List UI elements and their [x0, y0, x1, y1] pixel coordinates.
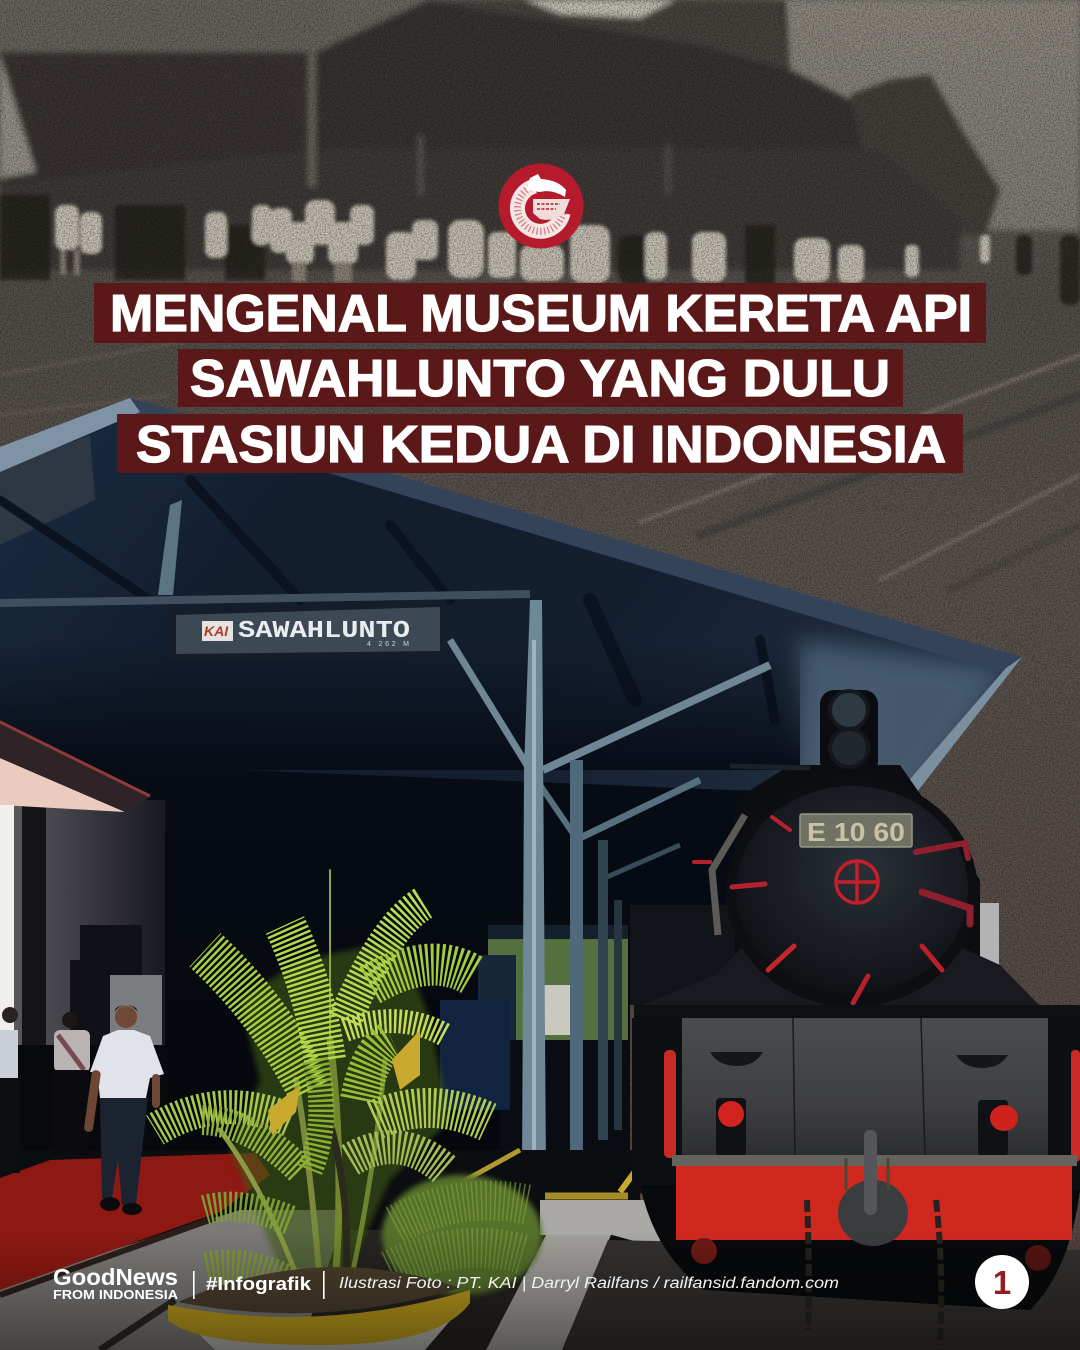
yellow platform edge markings: [455, 1150, 520, 1186]
horizontal roof beam: [0, 594, 530, 603]
cylinder saddles: [640, 940, 1040, 1006]
title line 1: MENGENAL MUSEUM KERETA API: [110, 285, 972, 343]
footer divider and hashtag: [193, 1271, 325, 1299]
red door clamps: [694, 817, 970, 1003]
bumper beam: [672, 1155, 1077, 1166]
old station roof and eaves: [0, 0, 1000, 270]
icon: GoodNews garuda logo: [498, 164, 584, 248]
lower frame body: [640, 1185, 1080, 1310]
palm stems: [220, 870, 385, 1285]
red handrails: [664, 1050, 676, 1158]
pilot front panels: [682, 1018, 1048, 1158]
signal lamps: [730, 690, 878, 775]
red buffers: [716, 1098, 1018, 1156]
photo credit: Ilustrasi Foto : PT. KAI | Darryl Railfans / railfansid.fandom.com: [339, 1275, 839, 1292]
red valve wheel: [836, 861, 878, 903]
concrete slab: [540, 1200, 660, 1248]
roof underside details: [0, 435, 1010, 800]
old railway tracks: [0, 340, 1080, 590]
yellow pot: [168, 1267, 470, 1350]
crowd on the old platform: [0, 195, 1080, 305]
running board: [634, 1005, 1080, 1019]
title line 3: STASIUN KEDUA DI INDONESIA: [136, 416, 946, 474]
title line 2: SAWAHLUNTO YANG DULU: [190, 350, 890, 408]
tow chains: [807, 1200, 941, 1345]
soil bed: [300, 1230, 610, 1350]
KAI logo plate: [202, 621, 233, 641]
footer divider and hashtag: #Infografik: [206, 1274, 312, 1294]
left station building: [0, 720, 165, 1165]
bottom shade: [0, 1230, 1080, 1350]
title with maroon banners: [94, 283, 986, 474]
green garden seen through the station: [440, 925, 630, 1170]
station name sign: [170, 602, 445, 660]
page number badge: 1: [993, 1264, 1011, 1301]
smokebox: [726, 777, 978, 1007]
number plate: E 10 60: [807, 817, 905, 847]
KAI logo plate: KAI: [204, 623, 229, 639]
side cab body: [630, 905, 735, 1005]
palm plant in yellow pot: [155, 870, 542, 1350]
footer brand: GoodNews from Indonesia: FROM INDONESIA: [53, 1288, 178, 1302]
page number badge: [975, 1255, 1029, 1309]
staff member walking: [0, 1005, 164, 1215]
yellowing leaves: [268, 1030, 420, 1135]
coupler: [838, 1130, 908, 1246]
background visitors: [0, 1007, 90, 1173]
small vertical strut: [158, 500, 182, 595]
red carpet: [0, 1153, 270, 1290]
footer brand: GoodNews from Indonesia: GoodNews: [53, 1264, 178, 1290]
roof fascia edge: [130, 398, 1022, 675]
steel support columns and braces: [450, 600, 770, 1175]
white box behind the boiler: [960, 903, 999, 983]
station canopy roof: [0, 398, 1022, 1210]
side frame: [632, 1018, 682, 1193]
right gravel: [562, 1240, 1080, 1350]
station name sign: 4 262 M: [367, 641, 409, 648]
sign text: SAWAHLUNTO: [238, 618, 410, 645]
fluffy green bush: [382, 1175, 542, 1295]
footer brand: GoodNews from Indonesia: [53, 1264, 178, 1302]
locomotive E 10 60: [630, 690, 1080, 1345]
concrete curb: [486, 1235, 611, 1350]
ground: carpet, gravel and concrete: [0, 1150, 1080, 1350]
ballast gravel left: [0, 1210, 340, 1350]
palm fronds: [155, 902, 488, 1290]
palm foliage shade: [230, 940, 450, 1290]
